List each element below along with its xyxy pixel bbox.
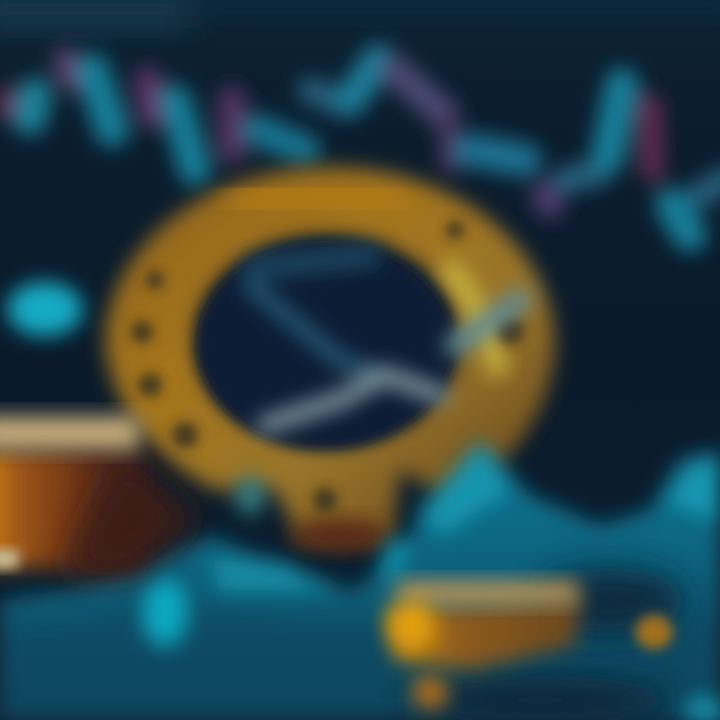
bright highlight: [445, 265, 500, 375]
upper price line chart: [5, 60, 720, 235]
coin stack left: [0, 416, 200, 575]
gold coin ring: [105, 167, 555, 551]
teal waves: [0, 440, 720, 720]
dark wave shading: [410, 568, 685, 720]
inner dark dial: [197, 241, 453, 449]
dial chart: [250, 255, 520, 425]
ring base shadow: [290, 519, 390, 551]
header glow: [0, 0, 720, 28]
small gold coin: [635, 615, 673, 649]
gold bar: [385, 580, 580, 709]
cyan blob left: [7, 282, 83, 336]
ring notches: [131, 221, 524, 512]
